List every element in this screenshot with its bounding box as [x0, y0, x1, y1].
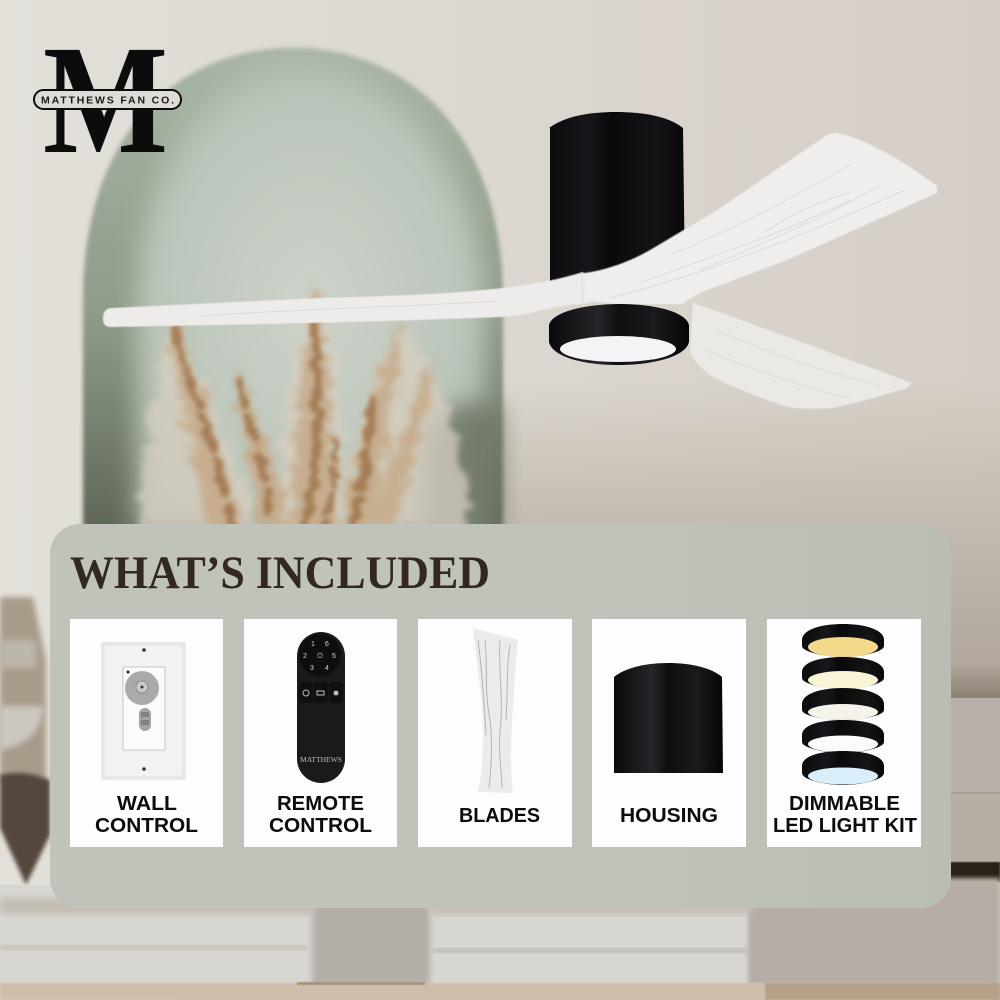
label: CONTROL: [95, 815, 198, 837]
dark throw: [0, 773, 50, 885]
icon: remote: 5: [332, 653, 336, 660]
icon: remote: 6: [325, 641, 329, 648]
label: [95, 793, 198, 837]
label: REMOTE: [277, 793, 364, 815]
card: housing: [592, 619, 746, 847]
label: [773, 793, 917, 837]
icon: remote: MATTHEWS: [300, 755, 342, 764]
icon: LED stack: [802, 624, 884, 785]
sofa, right: [940, 530, 1000, 882]
brown plume cores: [175, 310, 372, 528]
sofa and cushions, left: [0, 597, 50, 885]
panel: what's included: [50, 524, 951, 908]
tan plumes: [168, 280, 433, 530]
fan housing: [549, 112, 685, 282]
card: blades: [418, 619, 572, 847]
card: remote control: [244, 619, 397, 847]
icon: remote: 2: [303, 653, 307, 660]
sage arched niche: [83, 48, 503, 530]
label: WALL: [117, 793, 177, 815]
light ring: [549, 304, 689, 365]
pale feather halo: [139, 285, 468, 530]
icon: blade: [473, 628, 518, 793]
lower right blade: [690, 303, 912, 409]
heading: WHAT’S INCLUDED: [70, 547, 490, 599]
left blade: [103, 272, 590, 327]
floor: [0, 878, 1000, 1000]
blade grain: [200, 165, 905, 398]
label: HOUSING: [620, 805, 718, 827]
card: dimmable LED light kit: [767, 619, 921, 847]
label: [269, 793, 372, 837]
label: BLADES: [459, 805, 540, 827]
icon: wall plate: [101, 642, 186, 780]
logo: Matthews Fan Co.: MATTHEWS FAN CO.: [41, 94, 174, 106]
ceiling fan: [103, 112, 937, 409]
logo: Matthews Fan Co.: M: [43, 13, 168, 186]
icon: remote: 3: [310, 665, 314, 672]
label: LED LIGHT KIT: [773, 815, 917, 837]
upper right blade: [560, 133, 937, 304]
icon: remote: [297, 632, 345, 783]
icon: remote: ⏻: [317, 652, 323, 660]
label: CONTROL: [269, 815, 372, 837]
LED light: [560, 336, 676, 362]
pampas grass: [139, 280, 468, 530]
icon: remote: 4: [325, 665, 329, 672]
icon: housing: [614, 663, 723, 773]
card: wall control: [70, 619, 223, 847]
icon: remote: 1: [311, 641, 315, 648]
label: DIMMABLE: [789, 793, 900, 815]
